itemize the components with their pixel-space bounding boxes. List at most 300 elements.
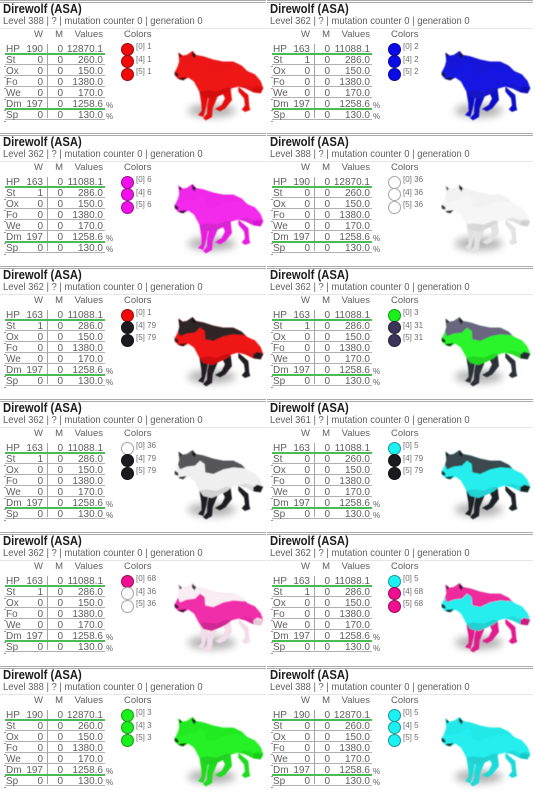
colour swatches	[121, 295, 156, 347]
title: Direwolf (ASA)	[270, 668, 349, 682]
stats table: %	[106, 378, 113, 387]
stats table: M	[55, 695, 63, 706]
stats table	[4, 561, 113, 654]
colour swatches: Colors	[391, 695, 418, 706]
title: Direwolf (ASA)	[3, 534, 82, 548]
stats table: Sp	[273, 509, 285, 520]
stats table: Values	[75, 561, 103, 572]
stats table: Sp	[6, 642, 18, 653]
stats table: 1380.0	[339, 609, 370, 620]
stats table: 0	[324, 498, 330, 509]
colour swatches: [0] 3	[403, 308, 419, 317]
colour swatches: Colors	[391, 561, 418, 572]
stats table	[271, 428, 380, 521]
colour swatches: [0] 2	[403, 42, 419, 51]
stats table: 0	[304, 66, 310, 77]
stats table: 0	[37, 343, 43, 354]
colour swatches	[121, 561, 156, 613]
stats table: HP	[273, 310, 287, 321]
wolf illustration	[440, 449, 531, 521]
stats table: Values	[342, 295, 370, 306]
stats table: %	[106, 234, 113, 243]
stats table: 170.0	[78, 221, 103, 232]
stats table: M	[322, 295, 330, 306]
stats table: W	[301, 295, 310, 306]
stats table: 0	[324, 732, 330, 743]
stats table: Fo	[273, 77, 285, 88]
stats table: 0	[37, 465, 43, 476]
colour swatches	[121, 428, 156, 480]
stats table: 0	[37, 221, 43, 232]
stats table: Values	[75, 162, 103, 173]
stats table: 0	[37, 776, 43, 787]
stats table: W	[301, 695, 310, 706]
stats table: 12870.1	[67, 44, 103, 55]
stats table: 0	[324, 66, 330, 77]
stats table: 0	[57, 332, 63, 343]
stats table: 12870.1	[334, 710, 370, 721]
stats table: W	[34, 295, 43, 306]
stats table: Ox	[6, 465, 19, 476]
subtitle: Level 362 | ? | mutation counter 0 | generation 0	[270, 16, 470, 27]
stats table: 286.0	[78, 587, 103, 598]
stats table: 0	[324, 110, 330, 121]
stats table: 0	[57, 509, 63, 520]
colour swatches: [0] 5	[403, 574, 419, 583]
stats table: 1380.0	[72, 609, 103, 620]
stats table: HP	[6, 443, 20, 454]
stats table: 0	[57, 732, 63, 743]
subtitle: Level 362 | ? | mutation counter 0 | generation 0	[3, 149, 203, 160]
stats table: 1258.6	[72, 631, 103, 642]
stats table: HP	[6, 576, 20, 587]
stats table: 0	[304, 77, 310, 88]
stats table: 0	[324, 221, 330, 232]
stats table: 150.0	[78, 598, 103, 609]
stats table: Dm	[6, 99, 22, 110]
stats table: 0	[57, 354, 63, 365]
stats table: Ox	[273, 66, 286, 77]
stats table: W	[34, 561, 43, 572]
stats table: 1258.6	[339, 765, 370, 776]
stats table: 0	[304, 509, 310, 520]
stats table: Fo	[273, 743, 285, 754]
stats table: HP	[6, 177, 20, 188]
stats table: 11088.1	[68, 177, 103, 188]
stats table: %	[373, 778, 380, 787]
colour swatches	[121, 695, 152, 747]
stats table: 0	[57, 721, 63, 732]
stats table: 1	[37, 188, 43, 199]
stats table: %	[106, 101, 113, 110]
stats table: Sp	[6, 110, 18, 121]
stats table: 0	[324, 721, 330, 732]
stats table: W	[301, 428, 310, 439]
stats table: 1258.6	[72, 365, 103, 376]
stats table: 163	[293, 44, 310, 55]
stats table: 0	[304, 343, 310, 354]
colour swatches: Colors	[391, 162, 418, 173]
stats table: M	[322, 695, 330, 706]
stats table: St	[6, 454, 15, 465]
stats table: HP	[273, 576, 287, 587]
stats table: 0	[57, 232, 63, 243]
stats table: 150.0	[345, 199, 370, 210]
card: red direwolf	[0, 0, 266, 133]
stats table: 150.0	[345, 598, 370, 609]
stats table: 0	[324, 210, 330, 221]
stats table: 150.0	[345, 465, 370, 476]
stats table: HP	[6, 44, 20, 55]
stats table: 0	[324, 310, 330, 321]
title: Direwolf (ASA)	[270, 401, 349, 415]
stats table: HP	[6, 710, 20, 721]
stats table: 12870.1	[334, 177, 370, 188]
stats table: 0	[304, 754, 310, 765]
title: Direwolf (ASA)	[3, 268, 82, 282]
stats table: 0	[324, 754, 330, 765]
colour swatches	[388, 428, 423, 480]
stats table: 130.0	[78, 110, 103, 121]
colour swatches: [0] 5	[403, 708, 419, 717]
stats table: 190	[293, 710, 310, 721]
stats table: 0	[37, 609, 43, 620]
stats table: Ox	[6, 598, 19, 609]
stats table: 170.0	[345, 88, 370, 99]
stats table: 1	[37, 321, 43, 332]
stats table: 0	[324, 743, 330, 754]
stats table: %	[373, 500, 380, 509]
stats table: Dm	[273, 498, 289, 509]
stats table: Ox	[6, 732, 19, 743]
stats table: 0	[304, 376, 310, 387]
stats table: 0	[57, 609, 63, 620]
stats table: Fo	[273, 343, 285, 354]
stats table: 0	[37, 243, 43, 254]
stats table: 163	[293, 576, 310, 587]
wolf illustration	[174, 582, 264, 654]
colour swatches	[388, 162, 423, 214]
stats table: 0	[57, 243, 63, 254]
stats table: 0	[324, 243, 330, 254]
stats table: HP	[273, 44, 287, 55]
stats table: 0	[324, 354, 330, 365]
stats table: 1380.0	[339, 210, 370, 221]
wolf illustration	[174, 316, 264, 388]
stats table: Dm	[6, 498, 22, 509]
stats table: %	[106, 500, 113, 509]
stats table: 0	[57, 88, 63, 99]
stats table: %	[373, 511, 380, 520]
stats table: 0	[304, 776, 310, 787]
stats table: Ox	[6, 66, 19, 77]
subtitle: Level 361 | ? | mutation counter 0 | generation 0	[270, 415, 470, 426]
stats table: %	[373, 112, 380, 121]
stats table: 0	[57, 210, 63, 221]
stats table: 1258.6	[72, 765, 103, 776]
wolf illustration	[440, 50, 531, 122]
stats table: 0	[37, 598, 43, 609]
colour swatches: [5] 31	[403, 333, 423, 342]
stats table: 0	[304, 609, 310, 620]
stats table: 0	[37, 642, 43, 653]
stats table: Values	[75, 29, 103, 40]
card: white direwolf	[267, 133, 533, 266]
stats table: 0	[57, 620, 63, 631]
stats table: 190	[293, 177, 310, 188]
stats table: 0	[324, 776, 330, 787]
stats table: 0	[57, 221, 63, 232]
colour swatches: [4] 5	[403, 720, 419, 730]
colour swatches	[388, 695, 419, 747]
colour swatches: Colors	[124, 295, 151, 306]
stats table: 190	[26, 44, 43, 55]
wolf illustration	[174, 183, 264, 255]
colour swatches	[388, 295, 423, 347]
colour swatches: [4] 79	[136, 320, 156, 330]
stats table: St	[6, 55, 15, 66]
stats table: 130.0	[345, 110, 370, 121]
stats table: %	[373, 378, 380, 387]
stats table: W	[34, 428, 43, 439]
stats table: 1380.0	[339, 743, 370, 754]
stats table: 260.0	[78, 721, 103, 732]
stats table: We	[273, 754, 288, 765]
stats table: Sp	[273, 376, 285, 387]
colour swatches: [0] 1	[136, 42, 152, 51]
stats table: 0	[324, 44, 330, 55]
colour swatches: [5] 6	[136, 200, 152, 209]
stats table: Fo	[273, 476, 285, 487]
stats table: 0	[324, 188, 330, 199]
stats table: 197	[26, 765, 43, 776]
stats table: %	[106, 778, 113, 787]
subtitle: Level 388 | ? | mutation counter 0 | generation 0	[3, 16, 203, 27]
stats table: St	[273, 188, 282, 199]
colour swatches: [0] 5	[403, 441, 419, 450]
stats table: %	[106, 245, 113, 254]
stats table: 0	[324, 88, 330, 99]
stats table: 0	[304, 476, 310, 487]
stats table: 0	[324, 509, 330, 520]
stats table: 130.0	[78, 642, 103, 653]
wolf illustration	[174, 716, 264, 788]
stats table: 1380.0	[72, 210, 103, 221]
stats table: 0	[37, 354, 43, 365]
stats table: Sp	[6, 376, 18, 387]
stats table	[4, 428, 113, 521]
stats table: 0	[37, 210, 43, 221]
stats table: 0	[324, 631, 330, 642]
stats table: 0	[324, 454, 330, 465]
colour swatches	[388, 29, 419, 81]
card: magenta direwolf	[0, 133, 266, 266]
wolf illustration	[440, 316, 531, 388]
stats table: 130.0	[345, 243, 370, 254]
colour swatches: [5] 36	[403, 200, 423, 209]
colour swatches: [5] 3	[136, 733, 152, 742]
stats table: HP	[273, 443, 287, 454]
stats table: 197	[293, 498, 310, 509]
colour swatches: Colors	[124, 695, 151, 706]
stats table: Fo	[6, 476, 18, 487]
stats table: 0	[57, 376, 63, 387]
stats table: We	[273, 354, 288, 365]
colour swatches: [4] 79	[136, 454, 156, 462]
colour swatches: Colors	[391, 428, 418, 439]
stats table: 0	[324, 77, 330, 88]
stats table: %	[106, 767, 113, 776]
stats table: 163	[26, 443, 43, 454]
stats table: We	[273, 620, 288, 631]
stats table: 0	[37, 110, 43, 121]
colour swatches: [5] 79	[136, 333, 156, 342]
stats table: Ox	[273, 199, 286, 210]
title: Direwolf (ASA)	[3, 2, 82, 16]
stats table: Fo	[273, 609, 285, 620]
stats table: 0	[304, 721, 310, 732]
colour swatches	[388, 561, 423, 613]
stats table: Sp	[273, 776, 285, 787]
stats table: Fo	[6, 609, 18, 620]
stats table: 0	[324, 710, 330, 721]
stats table: 1380.0	[72, 77, 103, 88]
stats table: 0	[37, 732, 43, 743]
stats table: 0	[324, 199, 330, 210]
stats table: 0	[324, 332, 330, 343]
title: Direwolf (ASA)	[270, 534, 349, 548]
stats table: 1380.0	[339, 343, 370, 354]
stats table: Ox	[6, 199, 19, 210]
subtitle: Level 388 | ? | mutation counter 0 | generation 0	[270, 149, 470, 160]
stats table	[271, 162, 380, 255]
stats table: M	[55, 561, 63, 572]
stats table: 1380.0	[339, 476, 370, 487]
stats table: Values	[75, 695, 103, 706]
stats table: 197	[26, 99, 43, 110]
stats table: Ox	[6, 332, 19, 343]
stats table: 0	[37, 376, 43, 387]
stats table: 0	[57, 765, 63, 776]
stats table: 197	[26, 232, 43, 243]
stats table: M	[322, 29, 330, 40]
colour swatches: [0] 1	[136, 308, 152, 317]
stats table: 170.0	[345, 354, 370, 365]
stats table: 163	[26, 576, 43, 587]
stats table: 0	[37, 721, 43, 732]
stats table: 150.0	[78, 199, 103, 210]
stats table: Ox	[273, 598, 286, 609]
stats table: 0	[324, 321, 330, 332]
stats table: 1258.6	[339, 631, 370, 642]
stats table: 0	[37, 77, 43, 88]
card: red and black direwolf	[0, 266, 266, 399]
stats table: 170.0	[78, 620, 103, 631]
wolf illustration	[440, 582, 531, 654]
stats table: 11088.1	[335, 310, 370, 321]
stats table: 0	[324, 487, 330, 498]
stats table	[4, 29, 113, 122]
title: Direwolf (ASA)	[270, 135, 349, 149]
stats table: Ox	[273, 465, 286, 476]
stats table: 0	[304, 210, 310, 221]
stats table: 197	[26, 498, 43, 509]
stats table: Dm	[273, 232, 289, 243]
stats table: 130.0	[78, 376, 103, 387]
stats table: HP	[6, 310, 20, 321]
stats table: %	[106, 644, 113, 653]
stats table: 0	[324, 587, 330, 598]
card: green direwolf	[0, 666, 266, 799]
stats table: St	[6, 587, 15, 598]
stats table: 197	[26, 631, 43, 642]
card: blue direwolf	[267, 0, 533, 133]
stats table: 0	[324, 465, 330, 476]
stats table: 170.0	[78, 88, 103, 99]
stats table: Dm	[6, 765, 22, 776]
stats table: 286.0	[78, 454, 103, 465]
stats table: 170.0	[345, 754, 370, 765]
stats table: 0	[57, 776, 63, 787]
stats table: 11088.1	[68, 576, 103, 587]
colour swatches: [4] 1	[136, 54, 152, 64]
stats table: 0	[37, 55, 43, 66]
wolf illustration	[174, 50, 264, 122]
stats table: 0	[57, 365, 63, 376]
stats table: M	[322, 561, 330, 572]
stats table: Sp	[6, 776, 18, 787]
stats table: Dm	[273, 99, 289, 110]
stats table: 286.0	[78, 321, 103, 332]
stats table: Dm	[273, 365, 289, 376]
title: Direwolf (ASA)	[270, 2, 349, 16]
stats table: St	[273, 587, 282, 598]
stats table: 0	[37, 620, 43, 631]
stats table: 197	[26, 365, 43, 376]
stats table: St	[273, 321, 282, 332]
title: Direwolf (ASA)	[270, 268, 349, 282]
stats table: 1380.0	[339, 77, 370, 88]
stats table: %	[373, 367, 380, 376]
stats table: 0	[57, 188, 63, 199]
stats table: Values	[342, 428, 370, 439]
stats table: 260.0	[345, 721, 370, 732]
stats table: 0	[57, 110, 63, 121]
title: Direwolf (ASA)	[3, 668, 82, 682]
stats table: 0	[324, 598, 330, 609]
colour swatches: [0] 36	[136, 441, 156, 450]
stats table: %	[373, 633, 380, 642]
wolf illustration	[174, 450, 264, 521]
stats table: %	[106, 633, 113, 642]
stats table: 0	[304, 454, 310, 465]
stats table: 0	[57, 487, 63, 498]
stats table: 150.0	[78, 332, 103, 343]
stats table: 0	[37, 476, 43, 487]
stats table: 0	[37, 199, 43, 210]
stats table: 150.0	[345, 66, 370, 77]
stats table: Values	[342, 561, 370, 572]
stats table: 0	[57, 465, 63, 476]
stats table: We	[273, 88, 288, 99]
stats table: 0	[57, 498, 63, 509]
stats table: 0	[57, 598, 63, 609]
colour swatches	[121, 29, 152, 81]
stats table: 0	[37, 332, 43, 343]
stats table	[271, 561, 380, 654]
stats table: 130.0	[345, 376, 370, 387]
stats table: 170.0	[78, 754, 103, 765]
